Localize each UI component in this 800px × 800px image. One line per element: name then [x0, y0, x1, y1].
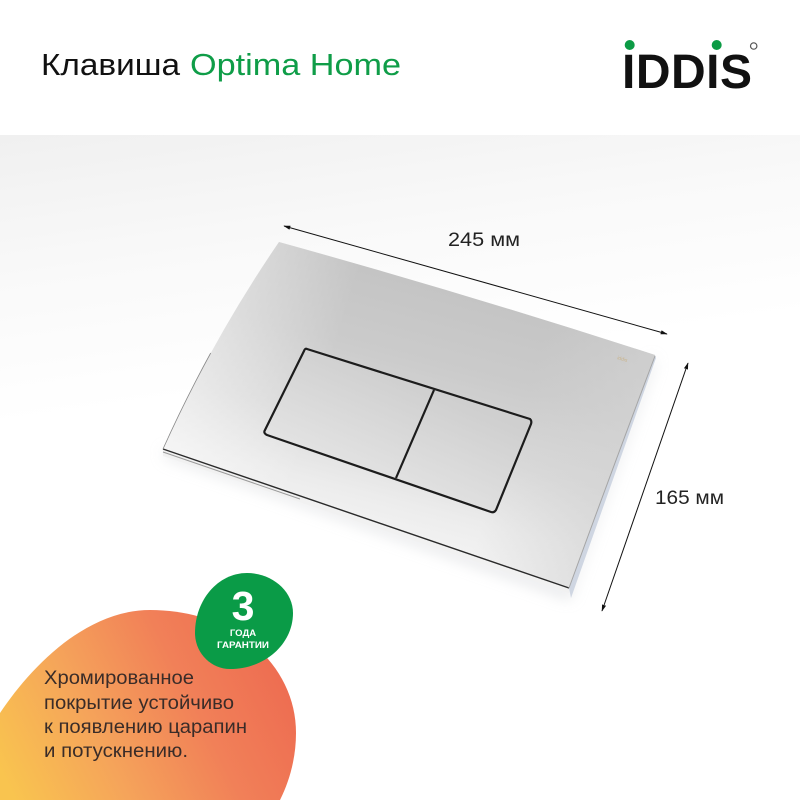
dimension label: 245 mm: 245 мм — [448, 230, 520, 251]
dimension label: 165 mm: 165 мм — [655, 488, 724, 509]
plate face — [163, 242, 655, 588]
product: chrome flush plate — [163, 242, 656, 600]
callout text — [44, 668, 247, 762]
callout text: покрытие устойчиво — [44, 693, 234, 714]
callout text: к появлению царапин — [44, 717, 247, 738]
title: Optima Home — [190, 47, 401, 82]
warranty badge: ГОДА — [230, 628, 256, 639]
callout blob — [0, 610, 296, 800]
plate left edge line — [163, 353, 211, 449]
dimension arrow: height — [602, 363, 688, 611]
plate right edge line — [569, 356, 655, 588]
plate shadow — [163, 355, 655, 600]
warranty badge: 3 — [232, 583, 254, 629]
plate bottom edge line — [163, 449, 569, 588]
dimension arrow: width — [284, 226, 667, 334]
title — [41, 47, 401, 82]
callout text: Хромированное — [44, 668, 194, 689]
logo: IDDIS: IDDIS — [622, 46, 752, 99]
header band — [0, 0, 800, 135]
plate bottom strip — [163, 449, 569, 593]
callout text: и потускнению. — [44, 741, 188, 762]
warranty badge: ГАРАНТИИ — [217, 640, 269, 651]
warranty badge — [195, 573, 293, 669]
title: Клавиша — [41, 47, 181, 82]
brand mark on plate: iddis — [616, 355, 628, 364]
plate side edge — [569, 355, 656, 598]
flush buttons — [264, 349, 531, 512]
